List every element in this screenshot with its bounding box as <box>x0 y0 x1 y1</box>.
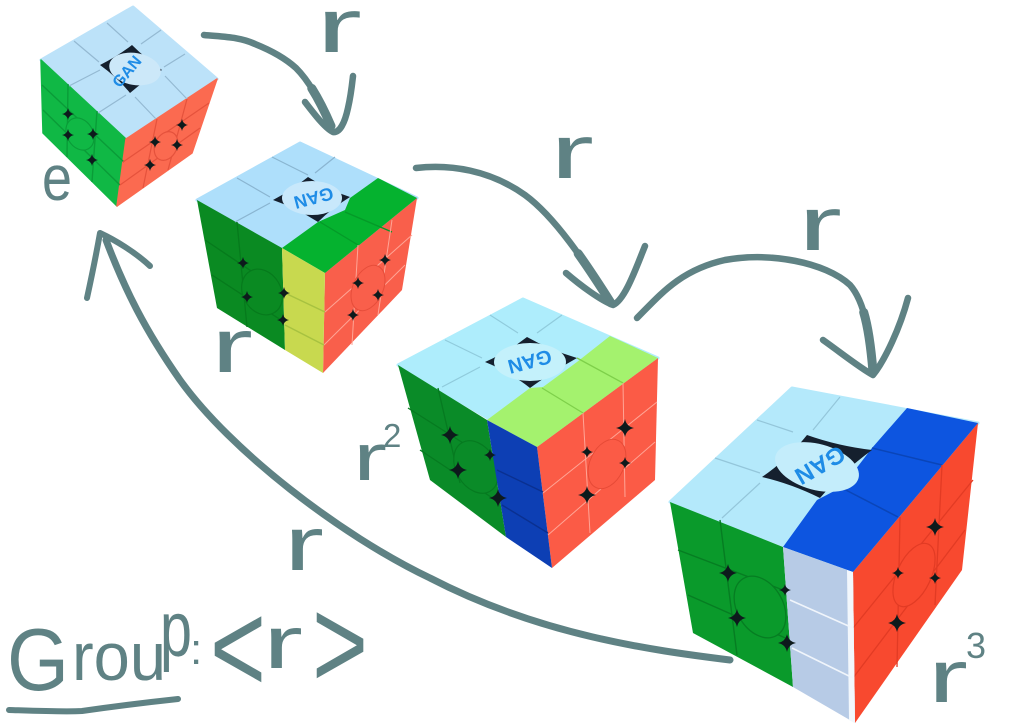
heading: Group generated by r: > <box>312 570 368 716</box>
label: r near third arrow: r <box>798 182 842 267</box>
yellow strip <box>282 248 325 373</box>
cube: state r squared <box>398 299 658 568</box>
label: r squared: r <box>353 420 387 494</box>
cube: state r cubed <box>670 388 978 723</box>
blue strip <box>487 420 552 568</box>
cube: identity state e <box>41 7 217 206</box>
arrow: r squared to r cubed <box>637 257 908 375</box>
label: r squared: 2 <box>383 417 401 454</box>
label: r near return arrow: r <box>284 502 324 587</box>
label: r squared <box>353 417 401 494</box>
heading: Group generated by r: G <box>7 610 69 709</box>
heading: Group generated by r: p <box>160 585 192 673</box>
label: r cubed: 3 <box>966 625 986 666</box>
heading: Group generated by r <box>7 570 368 720</box>
label: r cubed <box>928 625 986 718</box>
heading: Group generated by r: : <box>190 625 202 674</box>
heading: Group generated by r: rou <box>72 619 166 695</box>
arrow: r to r squared <box>416 167 645 305</box>
logo: GAN on r: GAN <box>292 183 335 213</box>
arrow: r cubed back to e <box>87 233 730 660</box>
logo: GAN on r cubed: GAN <box>790 439 850 490</box>
cube: state r <box>197 143 417 373</box>
label: r under second cube: r <box>211 304 253 389</box>
white strip <box>783 547 855 723</box>
heading: Group generated by r: < <box>210 574 266 720</box>
heading: Group generated by r: r <box>263 601 303 684</box>
label: e: e <box>42 142 72 214</box>
logo: GAN on r squared: GAN <box>505 344 554 377</box>
label: r cubed: r <box>928 635 968 718</box>
logo: GAN on e: GAN <box>110 53 145 91</box>
arrow: e to r <box>204 35 353 132</box>
label: r near second arrow: r <box>550 110 594 195</box>
underline <box>9 699 178 711</box>
